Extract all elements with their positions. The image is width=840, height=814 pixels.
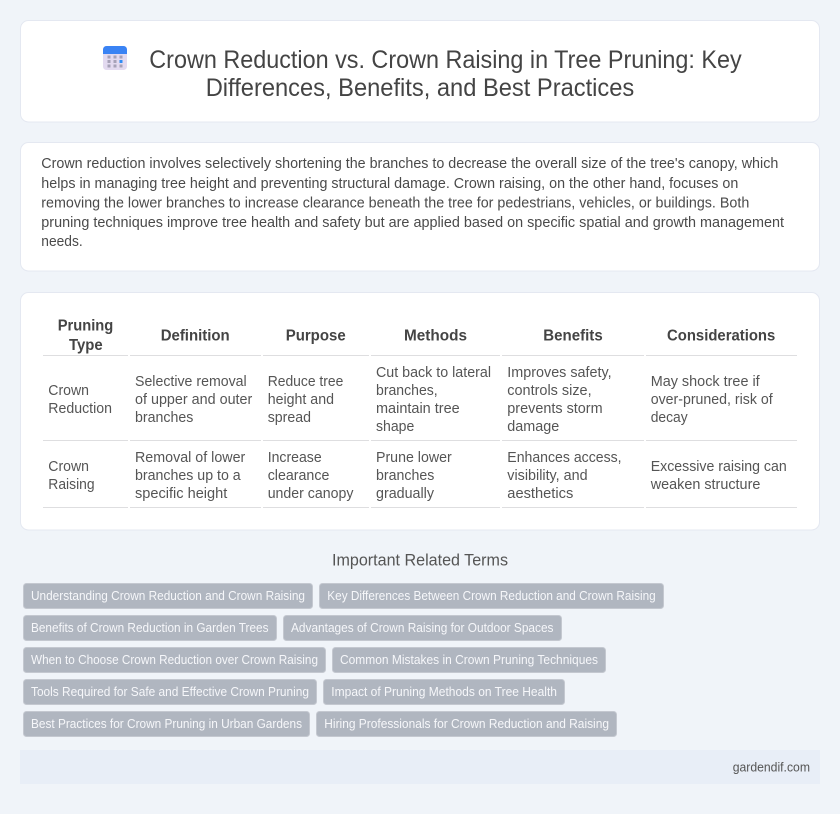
table row: crown reduction: May shock tree if xyxy=(651,374,761,390)
table row: crown raising: aesthetics xyxy=(507,486,573,502)
table row: crown reduction: damage xyxy=(507,419,559,435)
table row: crown raising: branches up to a xyxy=(135,468,241,484)
table header row: Methods xyxy=(404,328,467,345)
table row: crown reduction: controls size, xyxy=(507,383,592,399)
table row: crown reduction: Reduce tree xyxy=(268,374,343,390)
table row: crown reduction: over-pruned, risk of xyxy=(651,392,774,408)
table row: crown raising: Enhances access, xyxy=(507,450,622,466)
table row: crown raising: branches xyxy=(376,468,434,484)
icon: calendar xyxy=(103,46,127,70)
table row: crown raising: Removal of lower xyxy=(135,450,245,466)
table row: crown raising: weaken structure xyxy=(650,477,760,493)
table header row: Considerations xyxy=(667,328,775,345)
chip row 2 xyxy=(24,616,562,640)
table row: crown reduction: Reduction xyxy=(48,401,112,417)
table row: crown raising: Prune lower xyxy=(376,450,452,466)
table header row: Purpose xyxy=(286,328,346,345)
summary paragraph xyxy=(41,155,785,250)
chip row 5: Hiring Professionals for Crown Reduction and Raising xyxy=(324,717,609,731)
panel: comparison table xyxy=(20,292,820,530)
chip row 1: Understanding Crown Reduction and Crown Raising xyxy=(31,589,305,603)
title xyxy=(149,46,742,102)
chip row 4 xyxy=(24,680,564,704)
table row: crown reduction: Selective removal xyxy=(135,374,247,390)
table row: crown raising: gradually xyxy=(376,486,435,502)
table row: crown reduction: height and xyxy=(268,392,334,408)
chip row 5: Best Practices for Crown Pruning in Urban Gardens xyxy=(31,717,302,731)
table row: crown reduction: prevents storm xyxy=(507,401,603,417)
table row: crown raising xyxy=(48,450,787,502)
table header row: Definition xyxy=(161,328,230,345)
footer bar xyxy=(20,750,820,784)
footer source text: gardendif.com xyxy=(733,760,810,774)
chip row 3: When to Choose Crown Reduction over Crown Raising xyxy=(31,653,318,667)
panel: title header xyxy=(20,20,820,122)
panel: related term chips xyxy=(24,584,664,736)
table row: crown reduction: Crown xyxy=(48,383,89,399)
heading: important related terms: Important Related Terms xyxy=(332,551,508,570)
table row: crown raising: Crown xyxy=(48,459,89,475)
summary paragraph: helps in managing tree height and preventing structural damage. Crown raising, on the other hand, focuses on xyxy=(41,175,738,192)
table header row: Benefits xyxy=(543,328,603,345)
table row: crown raising: Raising xyxy=(48,477,95,493)
chip row 3 xyxy=(24,648,606,672)
title: Crown Reduction vs. Crown Raising in Tree Pruning: Key xyxy=(149,46,742,74)
table header row xyxy=(58,318,775,354)
table row: crown raising: visibility, and xyxy=(507,468,588,484)
chip row 4: Tools Required for Safe and Effective Crown Pruning xyxy=(31,685,309,699)
chip row 1 xyxy=(24,584,664,608)
table row: crown reduction: branches xyxy=(135,410,193,426)
table row: crown reduction: Improves safety, xyxy=(507,365,612,381)
table row: crown reduction: of upper and outer xyxy=(135,392,252,408)
table row: crown reduction xyxy=(48,365,774,435)
chip row 2: Advantages of Crown Raising for Outdoor Spaces xyxy=(291,621,554,635)
chip row 2: Benefits of Crown Reduction in Garden Trees xyxy=(31,621,268,635)
table row: crown reduction: decay xyxy=(651,410,688,426)
summary paragraph: needs. xyxy=(41,233,83,250)
table row: crown reduction: spread xyxy=(268,410,311,426)
table row: crown raising: clearance xyxy=(268,468,329,484)
table row: crown reduction: branches, xyxy=(376,383,438,399)
chip row 3: Common Mistakes in Crown Pruning Techniques xyxy=(340,653,598,667)
table row: crown raising: Excessive raising can xyxy=(651,459,787,475)
panel: summary text xyxy=(20,142,820,271)
table row: crown reduction: shape xyxy=(376,419,414,435)
summary paragraph: removing the lower branches to increase clearance beneath the tree for pedestrians, vehicles, or buildings. Both xyxy=(41,194,749,212)
table row: crown raising: Increase xyxy=(268,450,322,466)
table row: crown reduction: maintain tree xyxy=(376,401,460,417)
table row: crown reduction: Cut back to lateral xyxy=(376,365,491,381)
table header row: Pruning xyxy=(58,318,113,335)
table row: crown raising: specific height xyxy=(135,486,227,502)
table header row: Type xyxy=(69,337,103,354)
title: Differences, Benefits, and Best Practices xyxy=(206,74,634,102)
chip row 5 xyxy=(24,712,616,736)
table row: crown raising: under canopy xyxy=(268,486,354,502)
chip row 4: Impact of Pruning Methods on Tree Health xyxy=(331,685,557,699)
chip row 1: Key Differences Between Crown Reduction and Crown Raising xyxy=(327,589,656,603)
summary paragraph: pruning techniques improve tree health and safety but are applied based on specific spatial and growth management xyxy=(41,214,785,231)
summary paragraph: Crown reduction involves selectively shortening the branches to decrease the overall size of the tree's canopy, which xyxy=(41,155,778,172)
